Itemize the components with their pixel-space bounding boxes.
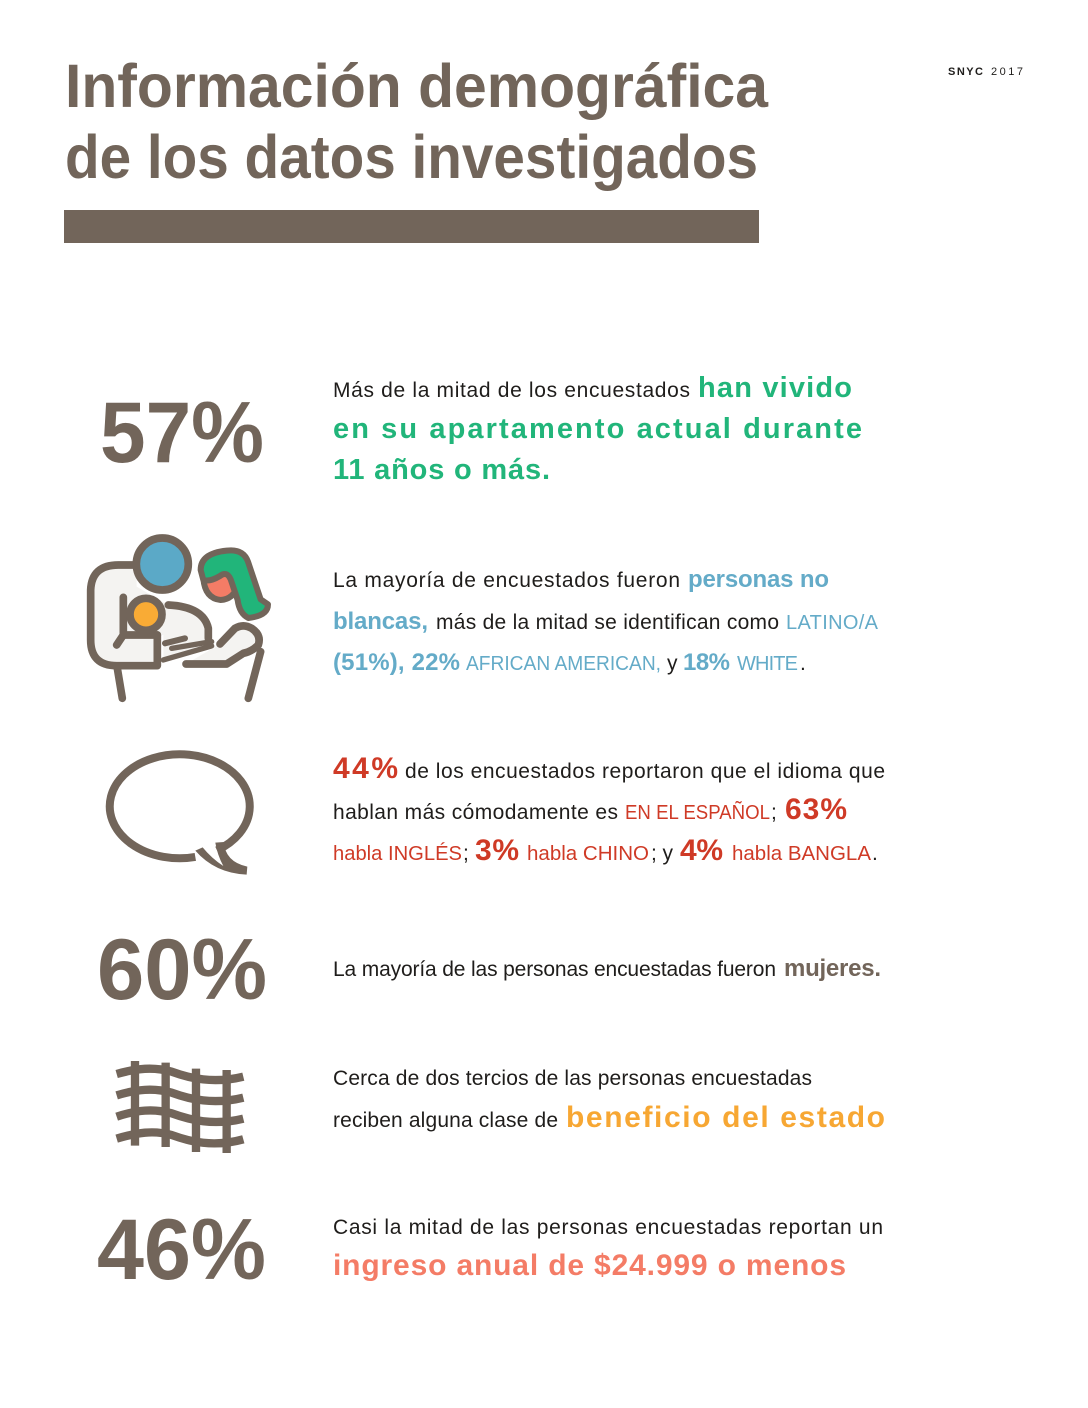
source label <box>948 66 1023 78</box>
text block: tenure: Más de la mitad de los encuestados <box>333 379 690 402</box>
text block: language: hablan más cómodamente es <box>333 801 618 824</box>
text block: ethnicity: La mayoría de encuestados fueron <box>333 569 680 592</box>
statistic: 60%: 60% <box>97 922 267 1018</box>
text block: ethnicity: blancas, <box>333 608 428 635</box>
text block: ethnicity: más de la mitad se identifican como <box>436 611 779 634</box>
text block: ethnicity: (51%), 22% <box>333 649 460 676</box>
text block: ethnicity: . <box>800 652 806 675</box>
text block: language: habla CHINO <box>527 843 649 865</box>
text block: language: 63% <box>785 793 847 826</box>
text block: income: Casi la mitad de las personas encuestadas reportan un <box>333 1216 883 1239</box>
statistic: 46%: 46% <box>97 1202 266 1298</box>
text block: income: ingreso anual de $24.999 o menos <box>333 1249 846 1282</box>
text block: ethnicity: personas no <box>688 566 829 593</box>
icon: speech bubble <box>110 754 250 875</box>
text block: language: ; <box>771 801 777 824</box>
text block: ethnicity <box>333 566 879 676</box>
icon: safety net <box>117 1061 243 1153</box>
text block: language <box>333 752 885 867</box>
statistic: 57%: 57% <box>100 385 264 481</box>
text block: language: ; y <box>651 842 674 865</box>
text block: language: de los encuestados reportaron que el idioma que <box>405 760 885 783</box>
text block: benefits: Cerca de dos tercios de las personas encuestadas <box>333 1067 812 1090</box>
text block: language: 44% <box>333 752 398 785</box>
text block: ethnicity: WHITE <box>737 653 798 675</box>
text block: ethnicity: y <box>667 652 678 675</box>
title <box>65 52 769 191</box>
text block: tenure: en su apartamento actual durante <box>333 413 862 445</box>
text block: income <box>333 1216 883 1282</box>
text block: benefits: beneficio del estado <box>566 1101 885 1134</box>
text block: language: habla BANGLA <box>732 843 872 865</box>
text block: language: EN EL ESPAÑOL <box>625 800 770 824</box>
text block: benefits <box>333 1067 885 1134</box>
text block: language: habla INGLÉS <box>333 842 462 865</box>
text block: language: 3% <box>475 834 519 867</box>
text block: benefits: reciben alguna clase de <box>333 1109 558 1132</box>
text block: tenure <box>333 372 862 486</box>
text block: women <box>333 955 881 982</box>
text block: ethnicity: LATINO/A <box>786 612 879 634</box>
text block: language: 4% <box>680 834 723 867</box>
icon: family <box>91 538 268 698</box>
text block: women: La mayoría de las personas encuestadas fueron <box>333 958 776 981</box>
source label: 2017 <box>991 66 1023 78</box>
source label: SNYC <box>948 66 983 78</box>
text block: language: . <box>872 842 878 865</box>
text block: language: ; <box>463 842 469 865</box>
title: de los datos investigados <box>65 123 758 191</box>
text block: ethnicity: 18% <box>683 649 730 676</box>
text block: tenure: han vivido <box>698 372 852 404</box>
title bar <box>64 210 759 243</box>
text block: tenure: 11 años o más. <box>333 454 550 486</box>
text block: women: mujeres. <box>784 955 881 982</box>
title: Información demográfica <box>65 52 769 120</box>
text block: ethnicity: AFRICAN AMERICAN, <box>466 653 661 675</box>
